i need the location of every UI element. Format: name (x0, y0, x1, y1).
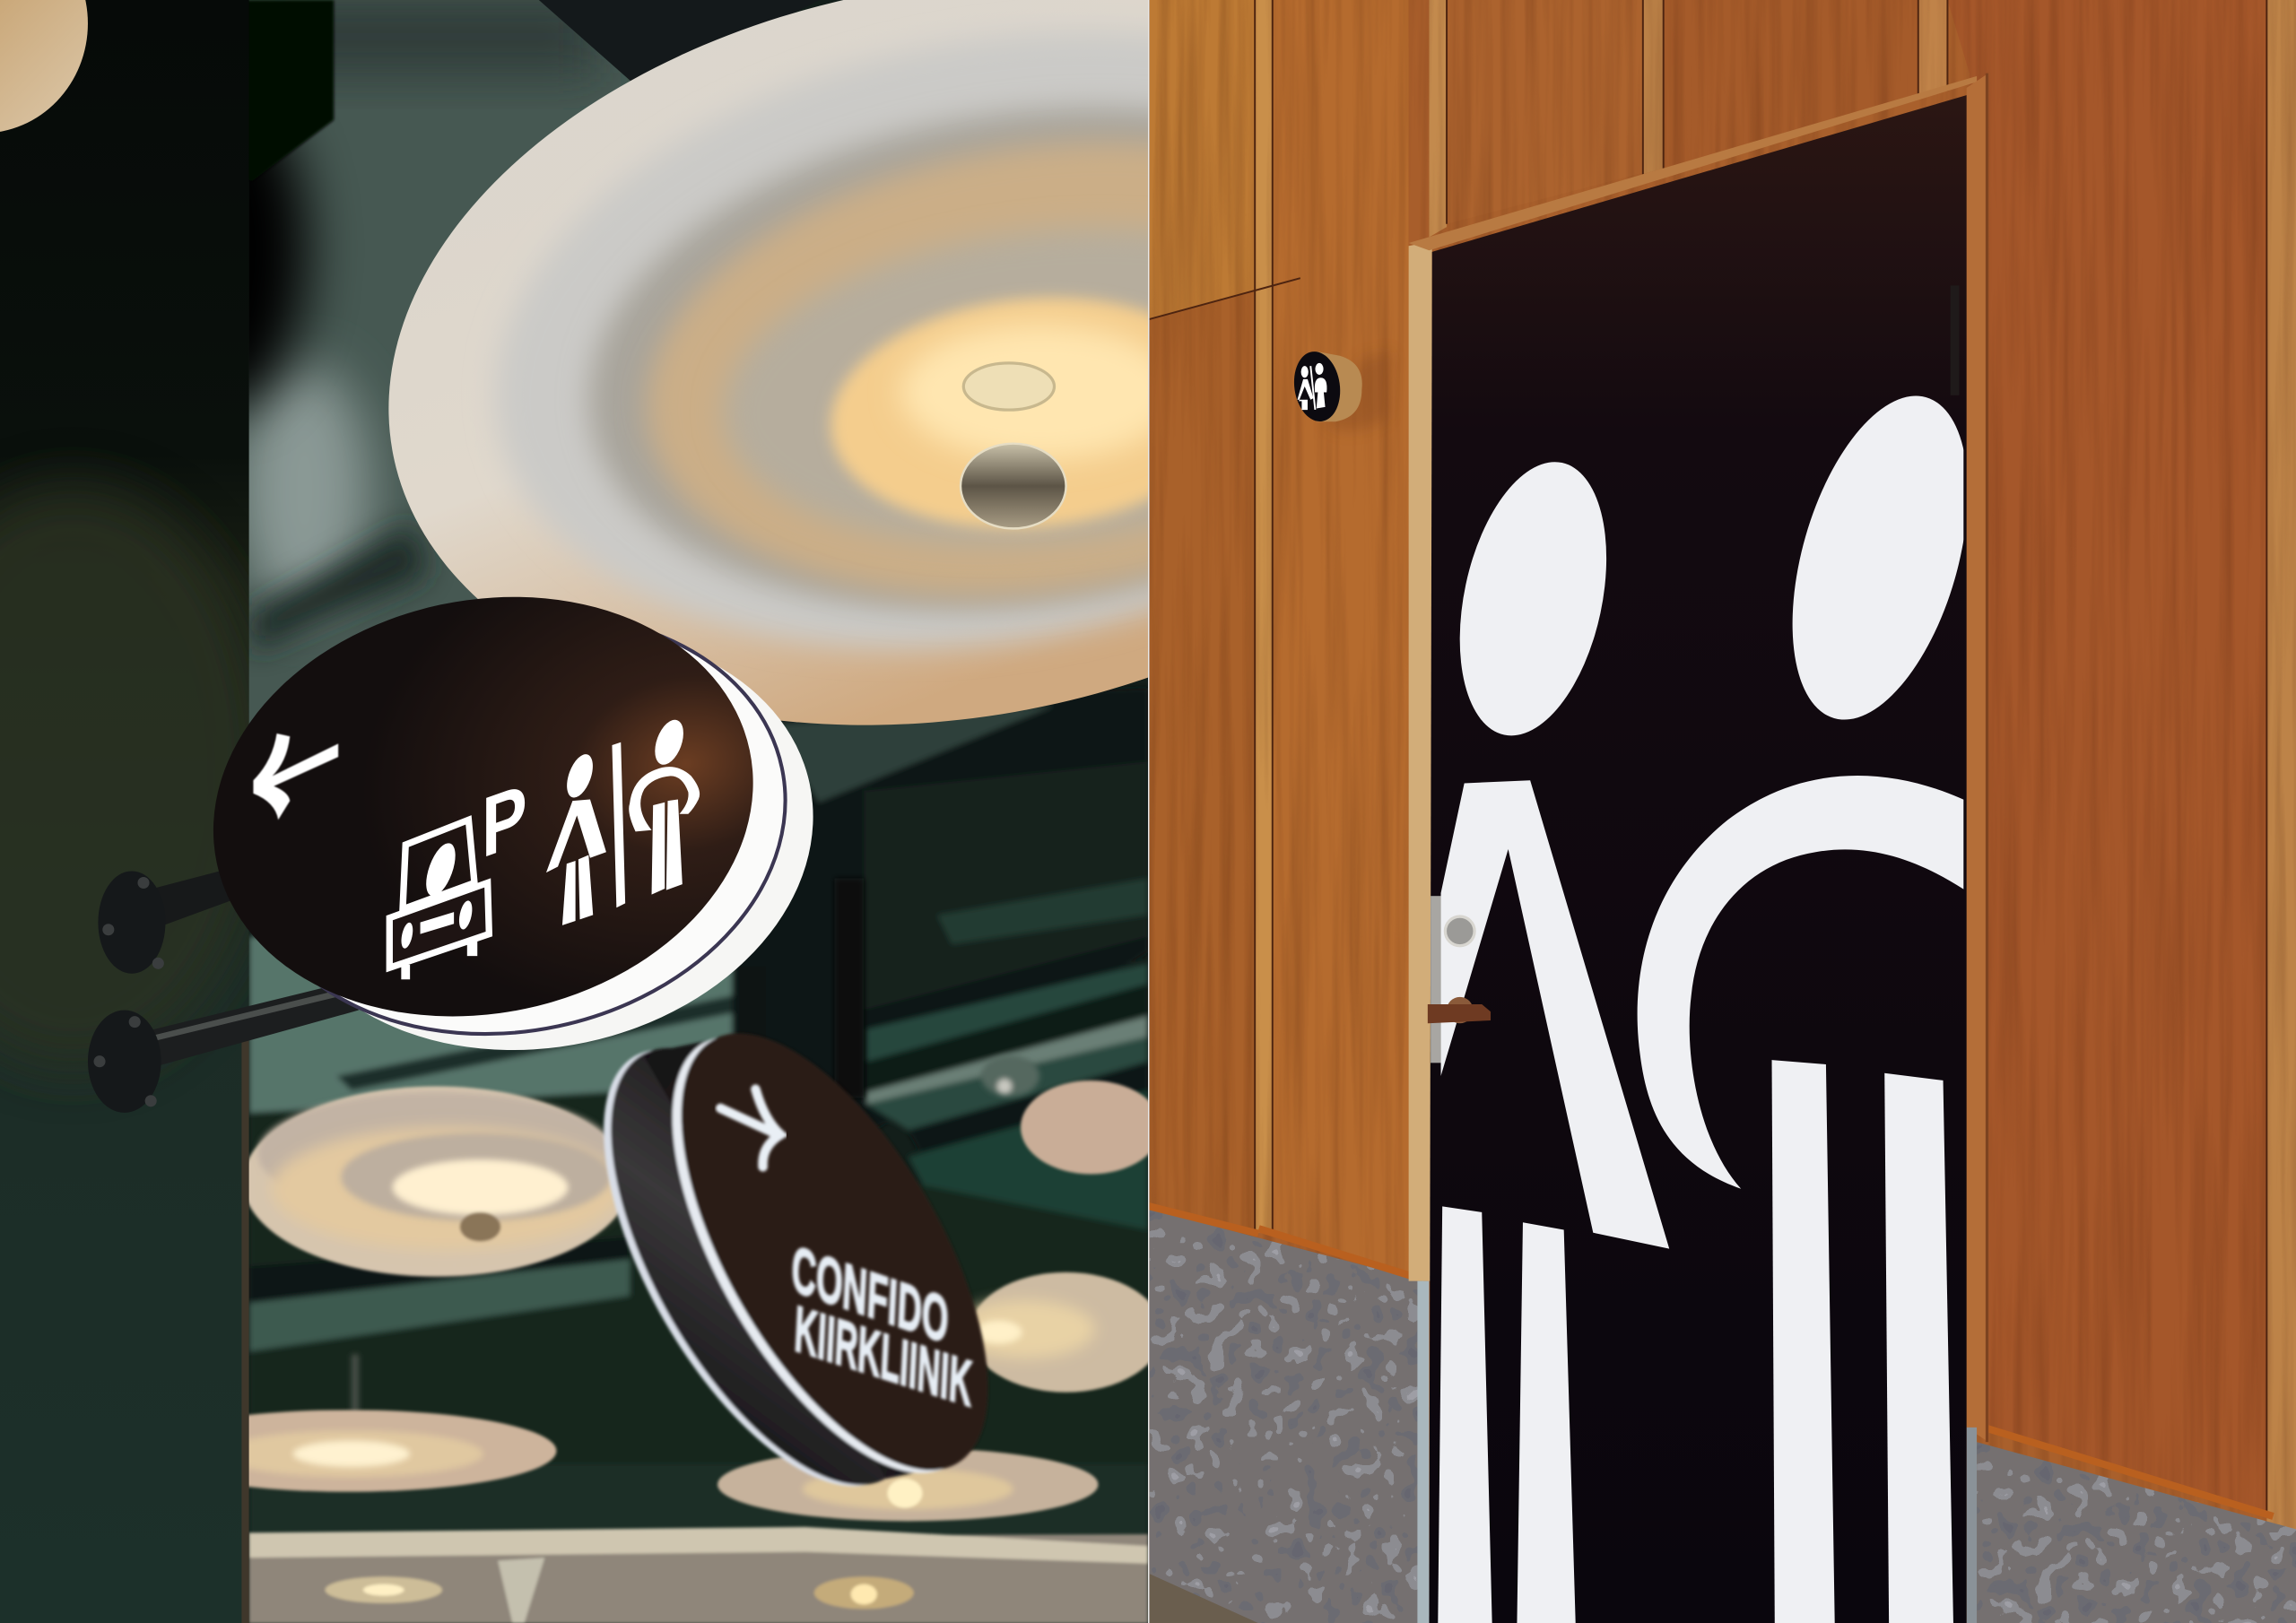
wood wall panels (1150, 0, 2296, 1623)
wall brackets (88, 871, 359, 1113)
glass floor reflection (249, 1527, 1148, 1623)
sign body (543, 986, 1049, 1533)
panel: wood wall and restroom door (1150, 0, 2296, 1623)
ceiling lamp fixture (963, 363, 1055, 410)
small lamps in background (249, 1078, 1148, 1523)
door graphic: man figure (1638, 376, 2001, 1623)
bracket detail on duct (981, 1055, 1039, 1097)
icon: right arrow (720, 1089, 780, 1167)
icon: left arrow (253, 733, 338, 820)
door hinge (1951, 285, 1959, 395)
door lock and handle (1428, 896, 1491, 1063)
terrazzo base (1150, 1210, 2296, 1623)
icon: car parking: P (482, 766, 527, 876)
icon: restroom figures (1298, 363, 1326, 410)
security camera dome (961, 444, 1066, 528)
sign: Confido Kiirkliinik (543, 967, 1049, 1533)
pendant rods (352, 879, 864, 1413)
icon: car parking (389, 766, 527, 979)
wood base trim (1150, 1206, 2270, 1515)
shaded lower ceiling (249, 688, 1148, 1537)
icon: woman (546, 751, 606, 925)
divider line (612, 742, 625, 907)
green wall (249, 0, 631, 725)
large ceiling lamp (388, 0, 1148, 725)
icon: man (629, 716, 700, 895)
wall restroom sign (1290, 349, 1391, 430)
panel gap (1148, 0, 1150, 1623)
sign label: KIIRKLIINIK (793, 1292, 974, 1421)
panel: illuminated ceiling and hanging signs (0, 0, 1148, 1623)
dark ceiling beams (249, 0, 718, 181)
green column (0, 0, 271, 1623)
sign label (790, 1232, 974, 1421)
illuminated sign layers (213, 597, 813, 1050)
door graphic: woman figure (1437, 448, 1669, 1623)
top left lamp (0, 0, 88, 134)
door (1429, 95, 1967, 1623)
sign: parking and restrooms (213, 597, 813, 1050)
door frame (1409, 74, 1988, 1623)
sign label: CONFIDO (790, 1232, 950, 1358)
